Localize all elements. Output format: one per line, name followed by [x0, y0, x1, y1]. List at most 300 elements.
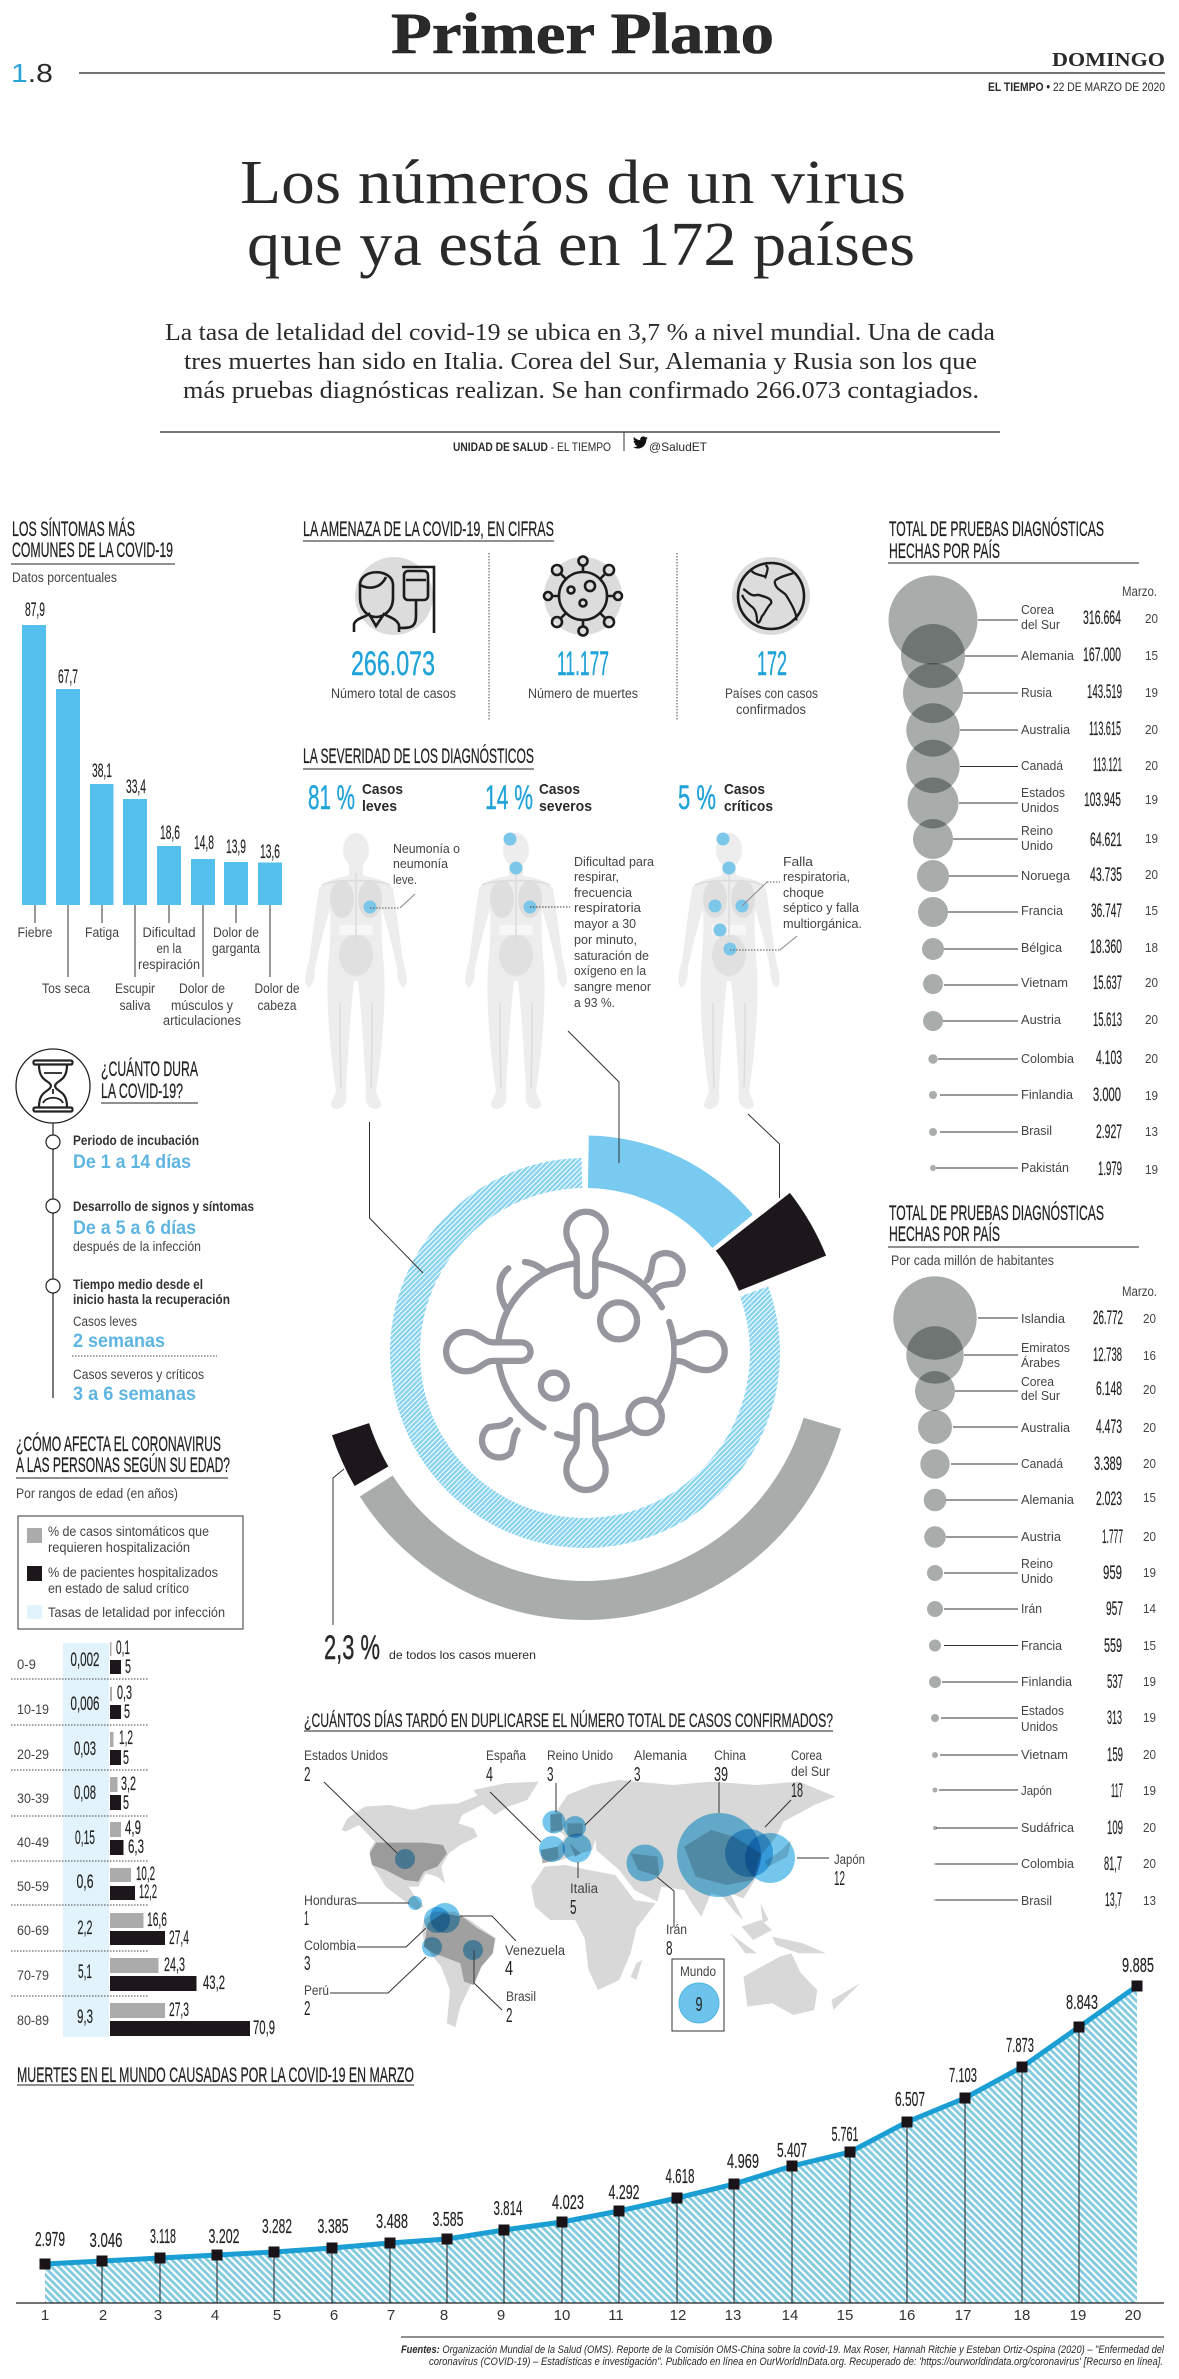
body: mild case: neumonía	[393, 856, 449, 871]
subtitle: Por rangos de edad (en años)	[16, 1486, 178, 1501]
bar labels	[18, 925, 300, 1028]
country names: Reino	[1021, 823, 1053, 838]
axis labels: 7	[387, 2307, 395, 2324]
leader ticks	[35, 905, 270, 977]
body: severe case: oxígeno en la	[574, 963, 647, 978]
panel: deaths chart	[16, 1955, 1164, 2324]
bar labels: saliva	[120, 998, 151, 1013]
panel: tests per million	[888, 1202, 1157, 1911]
country names: Irán	[1021, 1601, 1042, 1616]
panel: doubling map	[304, 1710, 865, 2031]
legend: % de pacientes hospitalizados	[48, 1565, 218, 1580]
axis labels: 9	[497, 2307, 505, 2324]
panel: tests per million: 13,7	[1105, 1890, 1122, 1911]
country names: Alemania	[1021, 1492, 1075, 1507]
axis labels: 8	[440, 2307, 448, 2324]
country names: Brasil	[1021, 1123, 1052, 1138]
bar values	[116, 1638, 275, 2039]
country names: Reino	[1021, 1556, 1053, 1571]
bar values: 5	[124, 1702, 130, 1723]
bar labels: Escupir	[115, 981, 155, 996]
values: 4.969	[727, 2151, 759, 2173]
axis labels: 5	[273, 2307, 281, 2324]
bar values: 3,2	[121, 1774, 136, 1795]
age labels: 40-49	[17, 1835, 49, 1850]
country names: del Sur	[1021, 617, 1061, 632]
country names	[1021, 1311, 1075, 1908]
bar values: 13,9	[226, 837, 246, 858]
bar values: 67,7	[58, 667, 78, 688]
dates: 15	[1143, 1638, 1156, 1653]
age labels: 0-9	[17, 1657, 36, 1672]
bar values: 12,2	[139, 1882, 157, 1903]
dates: 20	[1145, 758, 1158, 773]
values: 2.979	[35, 2229, 65, 2251]
country names: Australia	[1021, 1420, 1071, 1435]
body: critical case: multiorgánica.	[783, 916, 862, 931]
test counts	[1093, 1308, 1123, 1911]
legend: % de casos sintomáticos que	[48, 1524, 209, 1539]
country names: Bélgica	[1021, 940, 1063, 955]
figure: total cases	[331, 645, 456, 701]
severity: severe: severos	[539, 798, 592, 815]
figure: deaths	[528, 645, 638, 701]
body: severe case	[465, 832, 655, 1109]
country names: Canadá	[1021, 1456, 1064, 1471]
values: 5.407	[777, 2140, 807, 2162]
dates: 19	[1145, 792, 1158, 807]
bar values	[25, 600, 280, 863]
test counts: 167.000	[1083, 645, 1121, 666]
bar labels: Dolor de	[254, 981, 300, 996]
country names: Finlandia	[1021, 1674, 1073, 1689]
heading: duration: LA COVID-19?	[101, 1080, 183, 1103]
dates: 20	[1145, 722, 1158, 737]
body: severe case: a 93 %.	[574, 995, 615, 1010]
test counts: 64.621	[1090, 830, 1122, 851]
intro text: tres muertes han sido en Italia. Corea del Sur, Alemania y Rusia son los que	[184, 349, 977, 375]
test counts: 109	[1107, 1818, 1123, 1839]
dates: 19	[1143, 1783, 1156, 1798]
dates: 13	[1143, 1893, 1156, 1908]
country names: Alemania	[1021, 648, 1075, 663]
axis labels: 4	[211, 2307, 219, 2324]
bar values: 1,2	[119, 1728, 133, 1749]
map labels: north and europe: Italia	[570, 1881, 598, 1896]
map labels: americas: 2	[304, 1998, 310, 2020]
step: recovery: 3 a 6 semanas	[73, 1384, 196, 1405]
bar labels: respiración	[138, 957, 200, 972]
map labels: americas: Brasil	[506, 1989, 536, 2004]
map labels: north and europe: 4	[486, 1764, 493, 1786]
callout: fatality	[324, 1629, 536, 1667]
heading: total tests	[888, 518, 1139, 563]
values: 3.046	[90, 2230, 122, 2252]
bubbles	[888, 576, 978, 1171]
dates: 16	[1143, 1348, 1156, 1363]
axis labels: 19	[1070, 2307, 1086, 2324]
age labels: 60-69	[17, 1923, 49, 1938]
bar labels: cabeza	[258, 998, 297, 1013]
severity: critical: Casos	[724, 781, 765, 798]
bar labels: en la	[156, 941, 182, 956]
bar values: 0,1	[116, 1638, 130, 1659]
country names: Unido	[1021, 838, 1053, 853]
values: 4.618	[666, 2166, 694, 2188]
bar values: 13,6	[260, 842, 280, 863]
figure: total cases: Número total de casos	[331, 686, 456, 701]
bar values: 16,6	[147, 1910, 167, 1931]
country names: Canadá	[1021, 758, 1064, 773]
values: 4.292	[608, 2182, 640, 2204]
test counts: 36.747	[1091, 901, 1122, 922]
leader lines	[333, 1031, 780, 1625]
test counts	[1083, 608, 1122, 1180]
bar values: 38,1	[92, 761, 112, 782]
black bars	[110, 1660, 250, 2036]
body: mild case: Neumonía o	[393, 841, 460, 856]
panel: total tests	[888, 518, 1158, 1180]
axis labels: 17	[955, 2307, 971, 2324]
step: recovery: inicio hasta la recuperación	[73, 1292, 230, 1307]
body: severe case: respiratoria	[574, 900, 642, 915]
body: severe case: respirar,	[574, 869, 619, 884]
test counts: 959	[1103, 1563, 1122, 1584]
test counts: 316.664	[1083, 608, 1121, 629]
axis labels: 12	[670, 2307, 686, 2324]
values: 3.488	[376, 2211, 408, 2233]
map labels: americas: 3	[304, 1953, 310, 1975]
icon: central virus	[446, 1212, 725, 1490]
country names: Unido	[1021, 1571, 1053, 1586]
fatality rates: 0,03	[74, 1739, 96, 1760]
map labels: north and europe: Estados Unidos	[304, 1748, 388, 1763]
bar values: 70,9	[253, 2018, 275, 2039]
values	[35, 1955, 1154, 2252]
axis labels: 13	[725, 2307, 741, 2324]
step: incubation: De 1 a 14 días	[73, 1152, 191, 1173]
dates	[1145, 611, 1158, 1177]
values: 7.103	[949, 2065, 977, 2087]
intro text: La tasa de letalidad del covid-19 se ubica en 3,7 % a nivel mundial. Una de cada	[165, 320, 995, 346]
test counts: 3.389	[1094, 1454, 1122, 1475]
body: severe case: frecuencia	[574, 885, 633, 900]
step: symptoms: De a 5 a 6 días	[73, 1218, 196, 1239]
intro text	[165, 320, 995, 404]
test counts: 2.927	[1096, 1122, 1122, 1143]
world average box	[672, 1959, 724, 2031]
main title	[240, 149, 915, 279]
icon: patient with IV bag	[354, 557, 434, 635]
bar labels: Dolor de	[213, 925, 259, 940]
line: deaths	[45, 1986, 1137, 2264]
severity: severe: Casos	[539, 781, 580, 798]
dates: 19	[1143, 1565, 1156, 1580]
body: critical case: séptico y falla	[783, 900, 860, 915]
dates: 13	[1145, 1124, 1158, 1139]
country names: Austria	[1021, 1529, 1062, 1544]
figure: countries: Países con casos	[725, 686, 818, 701]
map labels: north and europe: del Sur	[791, 1764, 830, 1779]
bar values: 87,9	[25, 600, 45, 621]
dates: 20	[1143, 1820, 1156, 1835]
bar labels: Dolor de	[179, 981, 225, 996]
world map	[342, 1780, 860, 2027]
dates: 20	[1143, 1529, 1156, 1544]
test counts: 559	[1104, 1636, 1122, 1657]
values: 6.507	[895, 2089, 925, 2111]
icon: virus	[544, 556, 622, 636]
subtitle: Por cada millón de habitantes	[891, 1253, 1054, 1268]
markers	[40, 1980, 1142, 2270]
country names: Colombia	[1021, 1051, 1075, 1066]
axis labels: 20	[1125, 2307, 1141, 2324]
leader lines	[324, 1780, 829, 2010]
bubbles: countries	[395, 1810, 795, 1960]
subtitle: Datos porcentuales	[12, 570, 117, 585]
panel: total tests: 15.613	[1093, 1010, 1122, 1031]
axis labels: 14	[782, 2307, 798, 2324]
figure: countries: confirmados	[736, 702, 806, 717]
panel: severity	[303, 745, 862, 1109]
dates: 20	[1143, 1747, 1156, 1762]
axis labels: 16	[899, 2307, 915, 2324]
bar labels: Fatiga	[85, 925, 119, 940]
dates: 20	[1143, 1382, 1156, 1397]
step: recovery: Casos severos y críticos	[73, 1367, 204, 1382]
country names: Colombia	[1021, 1856, 1075, 1871]
body: mild case: leve.	[393, 872, 417, 887]
byline: @SaludET	[649, 440, 708, 454]
icon: globe	[732, 557, 810, 635]
figure: deaths: 11.177	[557, 645, 609, 683]
values: 5.761	[832, 2124, 858, 2146]
severity: critical	[678, 779, 773, 817]
severity: mild: Casos	[362, 781, 403, 798]
panel: tests per million: 117	[1111, 1781, 1123, 1802]
map labels: north and europe: Reino Unido	[547, 1748, 613, 1763]
heading: deaths: MUERTES EN EL MUNDO CAUSADAS POR LA COVID-19 EN MARZO	[17, 2064, 414, 2087]
severity: critical: 5 %	[678, 779, 716, 817]
test counts: 1.979	[1098, 1159, 1122, 1180]
map labels: americas	[304, 1893, 565, 2027]
country names: Estados	[1021, 1703, 1064, 1718]
fatality rates: 0,002	[70, 1650, 100, 1671]
byline: UNIDAD DE SALUD - EL TIEMPO	[453, 440, 611, 454]
country names: Vietnam	[1021, 975, 1068, 990]
age labels: 70-79	[17, 1968, 49, 1983]
test counts: 159	[1107, 1745, 1123, 1766]
dates: 20	[1143, 1856, 1156, 1871]
map labels: north and europe: 39	[714, 1764, 728, 1786]
bar values: 24,3	[164, 1955, 185, 1976]
heading: duration	[101, 1058, 198, 1103]
age labels: 20-29	[17, 1747, 49, 1762]
legend: Tasas de letalidad por infección	[48, 1605, 225, 1620]
step: symptoms: Desarrollo de signos y síntomas	[73, 1199, 254, 1214]
map labels: americas: Honduras	[304, 1893, 357, 1908]
fatality rates	[70, 1650, 100, 2028]
dates	[1143, 1311, 1156, 1908]
test counts: 313	[1107, 1708, 1122, 1729]
bar values: 5	[125, 1657, 131, 1678]
country names: Islandia	[1021, 1311, 1066, 1326]
map labels: north and europe: Alemania	[634, 1748, 687, 1763]
figure: deaths: Número de muertes	[528, 686, 638, 701]
bar labels: Dificultad	[142, 925, 196, 940]
bar values: 33,4	[126, 777, 146, 798]
fatality band	[63, 1643, 109, 2037]
bar values: 6,3	[128, 1837, 144, 1858]
country names: Francia	[1021, 903, 1064, 918]
world average box: 9	[696, 1994, 702, 2016]
bar values: 27,3	[169, 2000, 189, 2021]
dates: 19	[1143, 1674, 1156, 1689]
values: 3.385	[318, 2216, 348, 2238]
country names: Corea	[1021, 1374, 1055, 1389]
heading: map: ¿CUÁNTOS DÍAS TARDÓ EN DUPLICARSE EL NÚMERO TOTAL DE CASOS CONFIRMADOS?	[304, 1710, 833, 1732]
values: 4.023	[552, 2192, 584, 2214]
bar values: 4,9	[125, 1818, 141, 1839]
bar labels: articulaciones	[163, 1013, 241, 1028]
ring: mild cases hatched	[390, 1158, 780, 1548]
map labels: americas: 4	[505, 1958, 513, 1980]
ring: deaths	[332, 1423, 388, 1486]
panel: symptoms	[11, 518, 300, 1028]
bar values: 5	[123, 1793, 129, 1814]
axis	[16, 2302, 1164, 2304]
test counts: 537	[1107, 1672, 1123, 1693]
dates: 18	[1145, 940, 1158, 955]
body: critical case: respiratoria,	[783, 869, 850, 884]
map labels: americas: 2	[506, 2005, 512, 2027]
sources	[401, 2344, 1164, 2368]
axis labels: 11	[608, 2307, 624, 2324]
bar labels: músculos y	[171, 998, 233, 1013]
country names: Unidos	[1021, 800, 1059, 815]
body: mild case	[305, 833, 460, 1109]
step: symptoms	[46, 1199, 254, 1254]
dates: 19	[1145, 831, 1158, 846]
values: 3.118	[150, 2226, 176, 2248]
test counts: 6.148	[1096, 1379, 1122, 1400]
gray bars	[110, 1642, 165, 2018]
country names: Noruega	[1021, 868, 1071, 883]
country names: Austria	[1021, 1012, 1062, 1027]
dates: 15	[1143, 1490, 1156, 1505]
axis labels: 15	[837, 2307, 853, 2324]
dates: 19	[1145, 685, 1158, 700]
panel: tests per million: 1.777	[1102, 1527, 1123, 1548]
body: critical case	[678, 832, 862, 1109]
dates: 15	[1145, 903, 1158, 918]
section title: Primer Plano: Primer Plano	[391, 1, 774, 66]
axis labels	[41, 2307, 1141, 2324]
map labels: north and europe: 3	[547, 1764, 554, 1786]
byline	[453, 432, 708, 454]
test counts: 12.738	[1093, 1345, 1122, 1366]
dates: 20	[1145, 611, 1158, 626]
test counts: 26.772	[1093, 1308, 1123, 1329]
heading: duration: ¿CUÁNTO DURA	[101, 1058, 198, 1081]
country names: Finlandia	[1021, 1087, 1074, 1102]
severity: critical: críticos	[724, 798, 773, 815]
column header: Marzo.	[1122, 1284, 1157, 1299]
heading: age: ¿CÓMO AFECTA EL CORONAVIRUS	[16, 1433, 221, 1456]
dates: 20	[1143, 1420, 1156, 1435]
dates: 20	[1143, 1311, 1156, 1326]
dates: 15	[1145, 648, 1158, 663]
country names: Corea	[1021, 602, 1055, 617]
map labels: north and europe: China	[714, 1748, 746, 1763]
legend	[18, 1516, 243, 1629]
country names: Estados	[1021, 785, 1065, 800]
bar values: 14,8	[194, 833, 214, 854]
panel: total tests: 113.121	[1093, 755, 1122, 776]
heading: symptoms: COMUNES DE LA COVID-19	[12, 539, 173, 562]
callout: fatality: de todos los casos mueren	[389, 1648, 536, 1662]
test counts: 103.945	[1084, 790, 1121, 811]
map labels: americas: 1	[304, 1908, 309, 1930]
heading: symptoms: LOS SÍNTOMAS MÁS	[12, 518, 135, 541]
step: incubation	[46, 1133, 199, 1173]
map labels: north and europe: 8	[666, 1938, 672, 1960]
figure: countries	[725, 645, 818, 717]
axis labels: 6	[330, 2307, 338, 2324]
test counts: 957	[1106, 1599, 1123, 1620]
bar chart: symptoms	[22, 625, 282, 905]
severity: mild: leves	[362, 798, 397, 815]
intro text: más pruebas diagnósticas realizan. Se han confirmado 266.073 contagiados.	[183, 378, 979, 404]
panel: key figures	[303, 518, 818, 721]
dates: 20	[1145, 1051, 1158, 1066]
bar values: 0,3	[117, 1683, 132, 1704]
values: 3.202	[208, 2226, 240, 2248]
severity: mild: 81 %	[308, 779, 355, 817]
values: 3.585	[432, 2209, 464, 2231]
bubbles	[893, 1276, 977, 1901]
dates: 19	[1143, 1710, 1156, 1725]
bar values: 43,2	[203, 1973, 225, 1994]
dates: 19	[1145, 1088, 1158, 1103]
country names: Australia	[1021, 722, 1071, 737]
bar values: 10,2	[136, 1864, 155, 1885]
test counts: 18.360	[1090, 937, 1122, 958]
fatality rates: 2,2	[78, 1918, 92, 1939]
country names: Emiratos	[1021, 1340, 1070, 1355]
age labels: 50-59	[17, 1879, 49, 1894]
dates: 20	[1145, 1012, 1158, 1027]
map labels: north and europe: Irán	[666, 1922, 687, 1937]
test counts: 81,7	[1104, 1854, 1122, 1875]
map labels: americas: Colombia	[304, 1938, 356, 1953]
map labels: north and europe	[304, 1748, 865, 1960]
bar labels: garganta	[212, 941, 260, 956]
fatality rates: 0,15	[75, 1828, 95, 1849]
panel: age	[11, 1433, 275, 2039]
test counts: 143.519	[1087, 682, 1122, 703]
age labels	[17, 1657, 49, 2028]
country names: del Sur	[1021, 1388, 1061, 1403]
step: incubation: Periodo de incubación	[73, 1133, 199, 1148]
icon: hourglass	[16, 1049, 90, 1123]
test counts: 2.023	[1096, 1489, 1122, 1510]
figure: countries: 172	[757, 645, 787, 683]
timeline line	[52, 1123, 54, 1398]
body: severe case: sangre menor	[574, 979, 652, 994]
body: severe case: mayor a 30	[574, 916, 636, 931]
map labels: north and europe: 12	[834, 1868, 845, 1890]
